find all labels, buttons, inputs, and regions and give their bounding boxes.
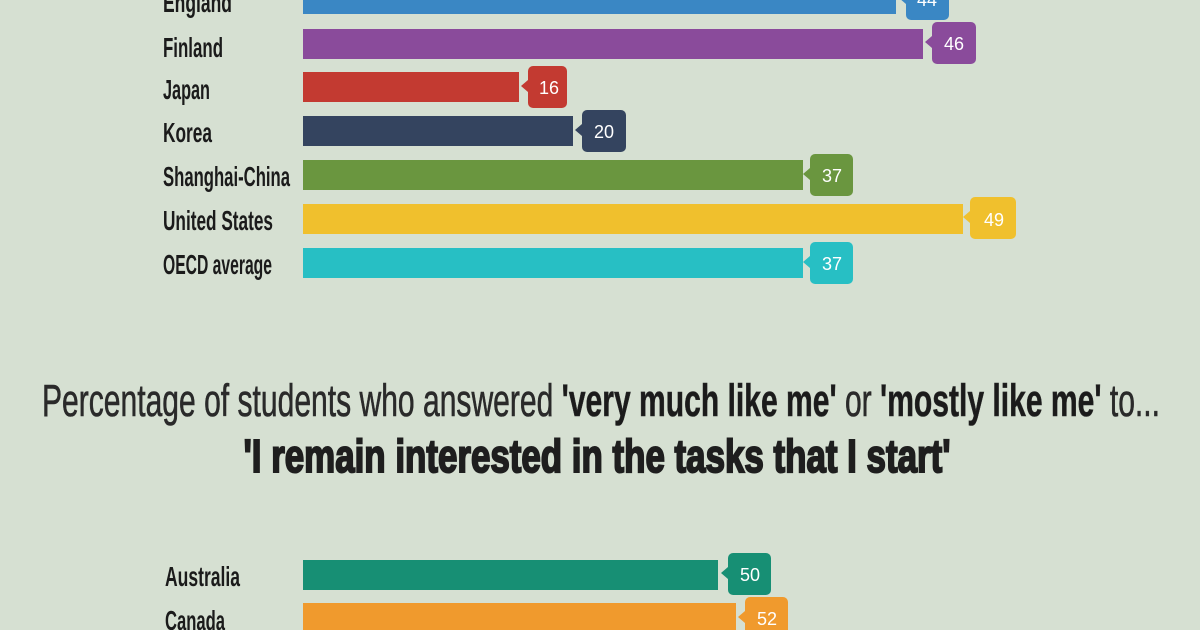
- bar: England: [163, 0, 949, 20]
- bar: Australia: Australia: [165, 561, 240, 592]
- bar: Shanghai-China: 37: [822, 166, 842, 186]
- bar: Korea: 20: [594, 122, 614, 142]
- bar: Shanghai-China: [163, 154, 853, 196]
- bar: Australia: [165, 553, 771, 595]
- bar: Shanghai-China: Shanghai-China: [163, 161, 290, 192]
- bar: United States: 49: [984, 210, 1004, 230]
- heading: question: Percentage of students who answered 'very much like me' or 'mostly like me' to...: [42, 375, 1160, 426]
- bar: Finland: 46: [944, 34, 964, 54]
- bar: OECD average: [163, 242, 853, 284]
- bar: United States: [163, 197, 1016, 239]
- chart: top bar chart: [163, 0, 1016, 284]
- bar: United States: United States: [163, 205, 273, 236]
- bar: Canada: 52: [757, 609, 777, 629]
- bar: Australia: 50: [740, 565, 760, 585]
- chart: bottom bar chart: [165, 553, 788, 630]
- bar: Japan: 16: [539, 78, 559, 98]
- bar: Korea: Korea: [163, 117, 212, 148]
- bar: OECD average: OECD average: [163, 249, 272, 280]
- bar: Japan: Japan: [163, 74, 210, 105]
- heading: statement: 'I remain interested in the tasks that I start': [244, 430, 950, 482]
- bar: Korea: [163, 110, 626, 152]
- bar: Canada: [165, 597, 788, 630]
- bar: OECD average: 37: [822, 254, 842, 274]
- bar: Japan: [163, 66, 567, 108]
- bar: Finland: Finland: [163, 32, 223, 63]
- bar: Finland: [163, 22, 976, 64]
